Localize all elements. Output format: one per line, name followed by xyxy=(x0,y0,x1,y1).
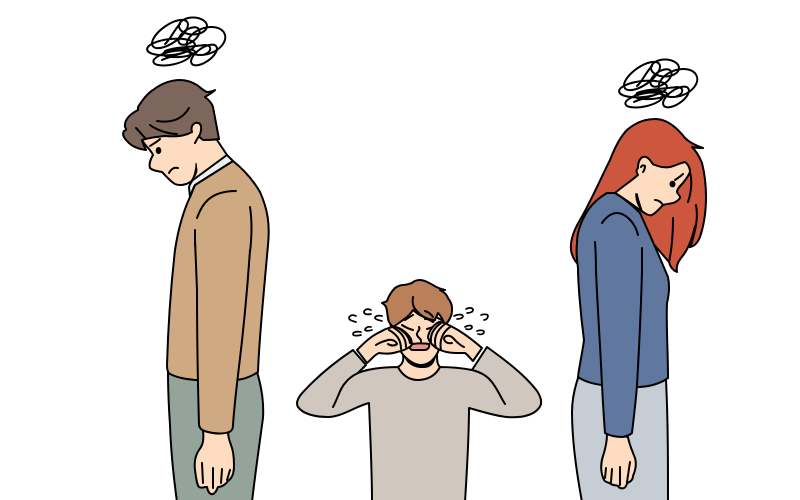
man sweater xyxy=(167,161,269,380)
child face xyxy=(390,305,445,365)
child head xyxy=(382,280,452,365)
child right hand xyxy=(428,322,482,361)
man ear xyxy=(192,123,201,143)
man hair xyxy=(123,80,219,150)
figure: sad man xyxy=(123,80,269,500)
man sleeve and shoulder lines xyxy=(195,191,252,252)
woman inner hair strands xyxy=(669,172,697,262)
child neck shadow xyxy=(405,356,436,368)
man eye and expression xyxy=(150,139,197,181)
man trousers xyxy=(168,372,263,500)
woman sweater xyxy=(577,193,669,387)
woman ear xyxy=(641,165,645,172)
man sweater sleeve xyxy=(195,240,250,434)
child mouth xyxy=(409,343,429,350)
woman eye and expression xyxy=(636,174,683,211)
woman hair xyxy=(571,119,706,272)
child sweater xyxy=(297,347,541,500)
woman neck and face xyxy=(615,157,690,215)
child closed eyes, brows and nose xyxy=(402,315,437,342)
man shirt collar xyxy=(189,155,233,197)
woman skirt xyxy=(572,378,668,500)
woman sweater sleeve xyxy=(596,270,642,437)
man neck and face xyxy=(142,115,227,185)
scribble: man's tangled thoughts xyxy=(146,15,229,69)
man hair strands xyxy=(136,108,189,139)
child tears xyxy=(349,308,488,336)
woman sleeve and shoulder lines xyxy=(595,213,642,275)
man hand xyxy=(195,430,234,494)
figure: sad woman xyxy=(571,119,706,500)
child hair strands xyxy=(413,297,433,320)
scribble: woman's tangled thoughts xyxy=(618,57,701,111)
child hair xyxy=(382,280,452,327)
woman hand xyxy=(601,434,636,488)
child left hand xyxy=(357,327,412,363)
child sweater fold lines xyxy=(333,370,505,407)
figure: crying child xyxy=(297,280,541,500)
child neck xyxy=(398,355,440,380)
